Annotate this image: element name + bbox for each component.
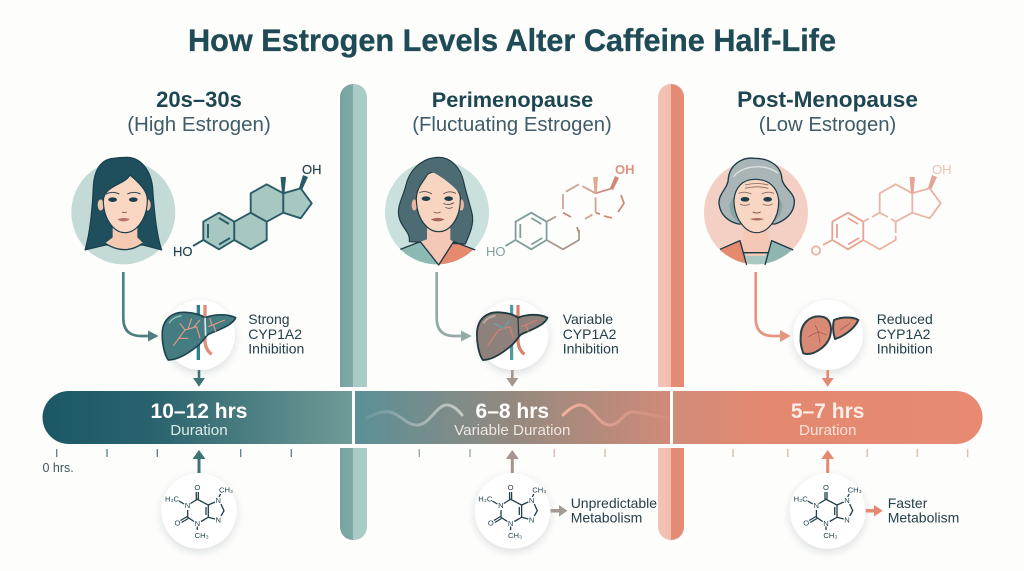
caffeine molecule: grey column: O <box>508 483 514 492</box>
portrait: young woman <box>71 157 175 264</box>
liver: variable inhibition <box>477 300 548 370</box>
portrait: older woman <box>704 158 808 270</box>
estrogen molecule: fluctuating: OH <box>615 162 634 177</box>
caffeine molecule: grey column: N <box>529 516 534 524</box>
caffeine molecule: grey column: CH₃ <box>508 531 522 540</box>
arrow: person to liver, coral <box>756 272 790 342</box>
coral vertical divider bar <box>658 84 684 540</box>
caffeine molecule: grey column: N <box>498 501 504 510</box>
estrogen molecule: fluctuating <box>486 162 634 259</box>
wave: right <box>563 405 668 425</box>
label: reduced inhibition: Reduced <box>877 311 933 327</box>
caffeine molecule: coral column: O <box>803 518 809 528</box>
heading: perimenopause: Perimenopause <box>432 87 593 112</box>
label: strong inhibition: Strong <box>248 311 290 327</box>
heading: post-menopause: (Low Estrogen) <box>759 114 896 136</box>
caffeine molecule: grey column: CH₃ <box>532 486 546 494</box>
label: strong inhibition <box>248 311 304 356</box>
heading: post-menopause: Post-Menopause <box>737 87 918 112</box>
duration bar: 20s-30s segment: Duration <box>170 422 228 439</box>
estrogen molecule: low <box>812 162 952 255</box>
axis label: 0 hrs. <box>42 461 74 475</box>
duration bar: post-menopause segment: Duration <box>799 422 856 439</box>
caffeine molecule: teal column: O <box>175 518 181 528</box>
label: strong inhibition: Inhibition <box>248 340 304 356</box>
timeline ticks <box>57 449 968 457</box>
caffeine molecule: coral column: CH₃ <box>823 531 837 540</box>
caffeine molecule: coral column: O <box>823 483 829 492</box>
heading: 20s-30s: (High Estrogen) <box>127 113 271 136</box>
caffeine molecule: teal column: CH₃ <box>195 531 209 540</box>
heading: perimenopause: (Fluctuating Estrogen) <box>412 114 612 136</box>
caffeine molecule: grey column: N <box>529 496 534 505</box>
duration bar: 20s-30s segment <box>42 391 352 444</box>
caffeine molecule: coral column: H₃C <box>794 494 808 504</box>
caffeine molecule: coral column <box>790 473 865 549</box>
estrogen molecule: strong <box>173 162 322 259</box>
heading: 20s-30s: 20s–30s <box>156 87 242 112</box>
heading: post-menopause <box>737 87 918 136</box>
duration bar: 20s-30s segment: 10–12 hrs <box>151 400 247 423</box>
duration bar: perimenopause segment <box>355 391 670 444</box>
title: How Estrogen Levels Alter Caffeine Half-Life <box>188 22 836 58</box>
arrow: liver to bar, coral <box>822 370 834 387</box>
caffeine molecule: teal column: N <box>195 519 200 528</box>
arrow: caffeine to unpredictable metabolism <box>551 505 568 516</box>
estrogen molecule: low: OH <box>932 162 952 177</box>
caffeine molecule: grey column: H₃C <box>478 494 493 504</box>
arrow: caffeine to bar, coral <box>821 450 834 473</box>
arrow: liver to bar, grey <box>506 370 518 387</box>
label: faster metabolism <box>888 495 959 526</box>
duration bar: post-menopause segment: 5–7 hrs <box>791 400 864 423</box>
caffeine molecule: coral column: N <box>844 516 850 524</box>
arrow: caffeine to bar, grey <box>506 450 519 473</box>
arrow: person to liver, teal <box>123 272 158 342</box>
label: unpredictable metabolism <box>571 495 657 526</box>
caffeine molecule: grey column <box>475 473 550 549</box>
label: unpredictable metabolism: Unpredictable <box>571 495 657 511</box>
heading: 20s-30s <box>127 87 271 136</box>
label: unpredictable metabolism: Metabolism <box>571 510 642 526</box>
liver: reduced inhibition <box>793 300 863 370</box>
label: strong inhibition: CYP1A2 <box>248 326 302 342</box>
caffeine molecule: teal column: CH₃ <box>219 486 233 494</box>
label: reduced inhibition: Inhibition <box>877 340 933 356</box>
duration bar: post-menopause segment <box>673 391 983 444</box>
estrogen molecule: strong: OH <box>302 162 322 177</box>
caffeine molecule: coral column: N <box>813 501 819 510</box>
caffeine molecule: teal column: H₃C <box>165 494 180 504</box>
caffeine molecule: coral column: N <box>844 496 850 505</box>
caffeine molecule: coral column: N <box>823 519 829 528</box>
arrow: caffeine to faster metabolism <box>866 505 883 516</box>
label: variable inhibition <box>563 311 619 356</box>
caffeine molecule: teal column: N <box>216 516 221 524</box>
duration bar: perimenopause segment: Variable Duration <box>454 422 570 439</box>
label: variable inhibition: Variable <box>563 311 613 327</box>
teal vertical divider bar <box>340 84 367 540</box>
label: variable inhibition: CYP1A2 <box>563 326 617 342</box>
arrow: person to liver, grey <box>437 272 472 342</box>
caffeine molecule: grey column: O <box>488 518 494 528</box>
caffeine molecule: grey column: N <box>508 519 513 528</box>
label: reduced inhibition <box>877 311 933 356</box>
white band behind duration bar <box>336 387 688 448</box>
label: reduced inhibition: CYP1A2 <box>877 326 931 342</box>
heading: perimenopause <box>412 87 612 136</box>
wave: left <box>367 405 462 425</box>
label: faster metabolism: Faster <box>888 495 928 511</box>
estrogen molecule: fluctuating: HO <box>486 244 506 259</box>
portrait: middle-aged woman <box>385 157 489 270</box>
caffeine molecule: teal column: N <box>185 501 190 510</box>
arrow: caffeine to bar, teal <box>192 450 206 473</box>
label: faster metabolism: Metabolism <box>888 510 959 526</box>
caffeine molecule: teal column <box>161 473 237 549</box>
arrow: liver to bar, teal <box>193 370 205 387</box>
caffeine molecule: coral column: CH₃ <box>848 486 862 494</box>
caffeine molecule: teal column: O <box>194 483 200 492</box>
liver: strong inhibition <box>162 300 236 370</box>
duration bar: perimenopause segment: 6–8 hrs <box>476 400 549 423</box>
caffeine molecule: teal column: N <box>216 496 221 505</box>
label: variable inhibition: Inhibition <box>563 340 619 356</box>
estrogen molecule: strong: HO <box>173 244 192 259</box>
